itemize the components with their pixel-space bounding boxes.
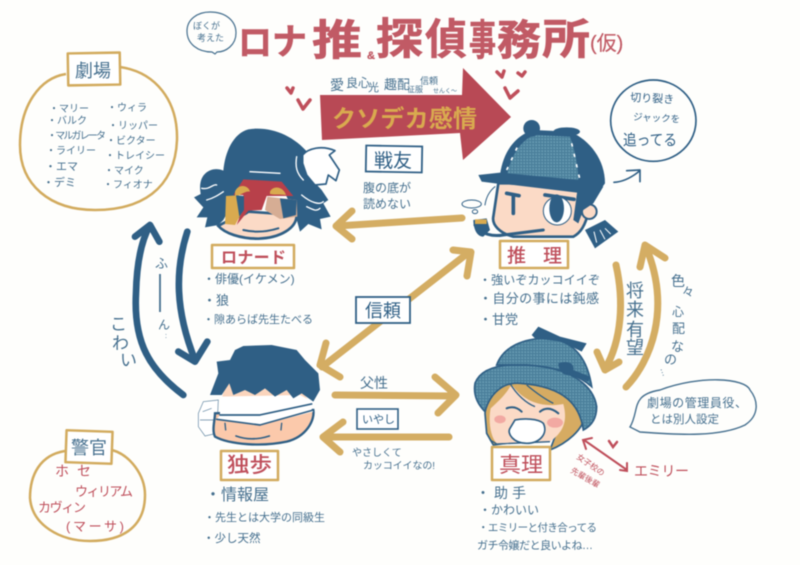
white tuft <box>303 148 339 185</box>
text: 色々心配なの: 色 <box>671 273 685 289</box>
text: こわい: わ <box>112 334 129 353</box>
relation: エミリー: 先輩後輩 <box>569 465 602 490</box>
face <box>490 387 565 443</box>
text: 将来有望: 来 <box>626 300 644 320</box>
speech bubble: 切り裂きジャックを追ってる <box>611 80 696 161</box>
mouth <box>509 419 545 443</box>
list: 警官 characters: カヴィン <box>38 500 86 515</box>
text: 将来有望: 有 <box>626 320 644 340</box>
relation: エミリー <box>569 438 689 490</box>
arrow: 推理 to ロナード <box>336 211 462 239</box>
forehead <box>222 382 308 400</box>
text: 切り裂きジャックを追ってる: 追ってる <box>623 132 677 149</box>
speech bubble: 劇場の管理員役: とは別人設定 <box>650 413 719 426</box>
text: 独歩 notes <box>203 486 325 545</box>
text: ふーん <box>155 256 170 340</box>
arrow: ロナード to 独歩 <box>178 232 207 362</box>
list: 劇場 characters: ・マルガレータ <box>47 130 106 142</box>
title: ロ <box>238 22 272 63</box>
hearts <box>287 71 525 109</box>
hair highlights <box>202 157 323 210</box>
text: 推理 notes: ・強いぞカッコイイぞ <box>479 273 600 287</box>
label: 独歩 <box>221 451 278 480</box>
face <box>493 183 603 237</box>
list: 劇場 characters: ・ビクター <box>106 135 156 147</box>
text: 父性: 父性 <box>360 375 388 391</box>
text: ふーん: ん <box>158 318 170 332</box>
character: 独歩 <box>198 345 320 444</box>
text: 色々心配なの: な <box>671 339 684 354</box>
tag: 戦友: 戦友 <box>374 150 412 172</box>
list: 劇場 characters: ・リッパー <box>108 120 158 132</box>
small words above the red arrow: 愛 <box>330 77 344 93</box>
arrow to bubble <box>614 170 640 182</box>
cheeks <box>494 415 563 428</box>
text: 推理 notes <box>479 273 600 327</box>
title: (仮) <box>590 32 623 55</box>
text: 独歩 notes: ・少し天然 <box>203 531 261 545</box>
face <box>214 410 314 444</box>
character: 真理 <box>475 327 597 450</box>
text: 真理 notes: ・助手 <box>476 485 526 501</box>
hair back <box>485 382 585 450</box>
label: 独歩: 独歩 <box>227 454 272 477</box>
text: 色々心配なの: の <box>664 352 677 367</box>
speech bubble: ぼくが考えた <box>187 12 236 54</box>
text: こわい <box>110 315 137 370</box>
face lines <box>490 383 553 444</box>
text: やさしくてカッコイイなの <box>352 447 435 472</box>
label: 推理: 推理 <box>507 245 562 267</box>
text: ロナード notes: ・俳優(イケメン) <box>203 272 295 286</box>
small words above the red arrow: 光 <box>368 80 379 94</box>
tag: 信頼 <box>356 297 410 323</box>
smile <box>243 228 278 232</box>
label: 劇場: 劇場 <box>75 61 111 81</box>
text: 色々心配なの <box>658 273 694 378</box>
face <box>218 212 297 239</box>
text: 色々心配なの: … <box>658 366 671 378</box>
title: 事 <box>469 17 496 64</box>
thought bubble <box>462 187 495 214</box>
hat <box>478 120 605 195</box>
text: やさしくてカッコイイなの: カッコイイなの! <box>363 460 435 472</box>
text: 腹の底が読めない: 読めない <box>363 197 411 211</box>
fox mask <box>198 400 218 436</box>
text: 真理 notes: ガチ令嬢だと良いよね… <box>477 538 593 552</box>
speech bubble: ぼくが考えた: 考えた <box>197 33 224 43</box>
arrow: 推理 and 独歩 trust <box>320 250 471 377</box>
text: 将来有望: 将 <box>626 281 644 301</box>
character: ロナルド <box>194 129 339 239</box>
list: 劇場 characters: ・ライリー <box>46 145 96 157</box>
relation: エミリー: エミリー <box>634 463 689 479</box>
title: 所 <box>542 16 590 63</box>
ponytail <box>585 220 618 248</box>
label: 真理: 真理 <box>499 454 543 477</box>
arrow: 真理 to 独歩 <box>323 422 449 452</box>
relation: エミリー: 女子校の <box>575 451 607 478</box>
list: 警官 characters <box>38 463 133 534</box>
small words above the red arrow: 征服 <box>407 84 423 94</box>
list: 劇場 characters <box>43 102 165 191</box>
list: 警官 characters: ウィリアム <box>75 484 133 499</box>
big red arrow: クソデカ感情 <box>320 68 511 160</box>
text: 腹の底が読めない <box>363 180 411 211</box>
text: ふーん: : <box>165 333 167 340</box>
label: 真理 <box>492 447 550 480</box>
text: 真理 notes: ・エミリーと付き合ってる <box>478 521 597 534</box>
text: 将来有望 <box>626 281 644 358</box>
arrow: 独歩 to 真理 <box>335 377 456 413</box>
hat brim <box>475 365 597 430</box>
label: 推理 <box>500 241 568 268</box>
text: 切り裂きジャックを追ってる <box>623 91 680 149</box>
hat bows <box>532 327 590 382</box>
text: 独歩 notes: ・先生とは大学の同級生 <box>204 510 325 524</box>
title: ナ <box>272 21 307 62</box>
tag: いやし <box>357 409 398 429</box>
list: 劇場 characters: ・バルク <box>47 115 87 127</box>
title: 推 <box>312 17 362 64</box>
list: 劇場 characters: ・フィオナ <box>103 179 153 191</box>
text: 独歩 notes: ・情報屋 <box>205 486 269 504</box>
hair <box>210 345 320 402</box>
speech bubble: 劇場の管理員役: 劇場の管理員役、 <box>647 395 747 410</box>
text: ロナード notes <box>203 272 313 326</box>
arrow: 独歩 to ロナード <box>135 225 183 395</box>
character: 推理 <box>462 80 696 248</box>
text: こわい: い <box>120 351 137 370</box>
pipe <box>473 218 543 237</box>
list: 劇場 characters: ・エマ <box>45 161 78 173</box>
big red arrow: クソデカ感情: クソデカ感情 <box>332 105 477 133</box>
text: 将来有望: 望 <box>626 338 644 358</box>
tag: いやし: いやし <box>362 413 395 426</box>
title: & <box>367 50 375 62</box>
panel: 劇場 <box>20 53 177 210</box>
text: ロナード notes: ・狼 <box>203 293 229 308</box>
title: 偵 <box>425 16 467 63</box>
list: 劇場 characters: ・ウィラ <box>107 102 147 114</box>
text: 色々心配なの: 々 <box>682 285 694 299</box>
arrow: 推理 to 真理 <box>597 265 621 370</box>
text: 推理 notes: ・自分の事には鈍感 <box>479 291 599 306</box>
text: ロナード notes: ・隙あらば先生たべる <box>203 312 313 326</box>
text: やさしくてカッコイイなの: やさしくて <box>352 447 402 459</box>
panel: 警官 <box>30 430 145 541</box>
small words above the red arrow: 趣配 <box>384 77 410 92</box>
bandage <box>217 395 313 425</box>
small words above the red arrow: 信頼 <box>420 75 438 86</box>
label: ロナード <box>212 245 294 268</box>
title: 探 <box>376 16 423 64</box>
text: ふーん: ふ <box>155 256 168 271</box>
text: 真理 notes <box>476 485 597 552</box>
hair and hat <box>194 129 331 232</box>
speech bubble: 劇場の管理員役 <box>630 380 756 434</box>
list: 劇場 characters: ・マイク <box>104 165 144 177</box>
title: 務 <box>497 17 541 64</box>
eyes and monocle <box>507 193 574 225</box>
eyes <box>507 407 558 413</box>
list: 劇場 characters: ・マリー <box>49 104 89 115</box>
sunglasses <box>225 195 297 225</box>
small words above the red arrow <box>330 75 457 95</box>
text: 推理 notes: ・甘党 <box>479 312 518 327</box>
tag: 信頼: 信頼 <box>365 301 401 321</box>
text: こわい: こ <box>110 315 127 334</box>
arrow: 真理 to 推理 <box>626 245 665 387</box>
hat dome <box>497 338 592 387</box>
list: 警官 characters: (マーサ) <box>66 519 124 534</box>
list: 劇場 characters: ・トレイシー <box>105 151 165 162</box>
small words above the red arrow: 良心 <box>346 75 370 90</box>
tag: 戦友 <box>366 146 422 172</box>
small words above the red arrow: せんく〜 <box>433 88 457 95</box>
text: 切り裂きジャックを追ってる: 切り裂き <box>630 91 674 106</box>
speech bubble: ぼくが考えた: ぼくが <box>193 20 220 31</box>
list: 劇場 characters: ・デミ <box>43 175 76 189</box>
bandana <box>233 179 293 225</box>
label: 警官: 警官 <box>71 438 107 458</box>
label: 劇場 <box>68 53 120 85</box>
text: 真理 notes: ・かわいい <box>479 503 539 517</box>
title <box>238 16 623 64</box>
text: 色々心配なの: 心 <box>672 305 684 319</box>
text: 切り裂きジャックを追ってる: ジャックを <box>633 112 680 125</box>
label: ロナード: ロナード <box>221 250 286 267</box>
text: 腹の底が読めない: 腹の底が <box>363 180 411 195</box>
text: 色々心配なの: 配 <box>672 321 685 336</box>
list: 警官 characters: ホセ <box>55 463 91 479</box>
